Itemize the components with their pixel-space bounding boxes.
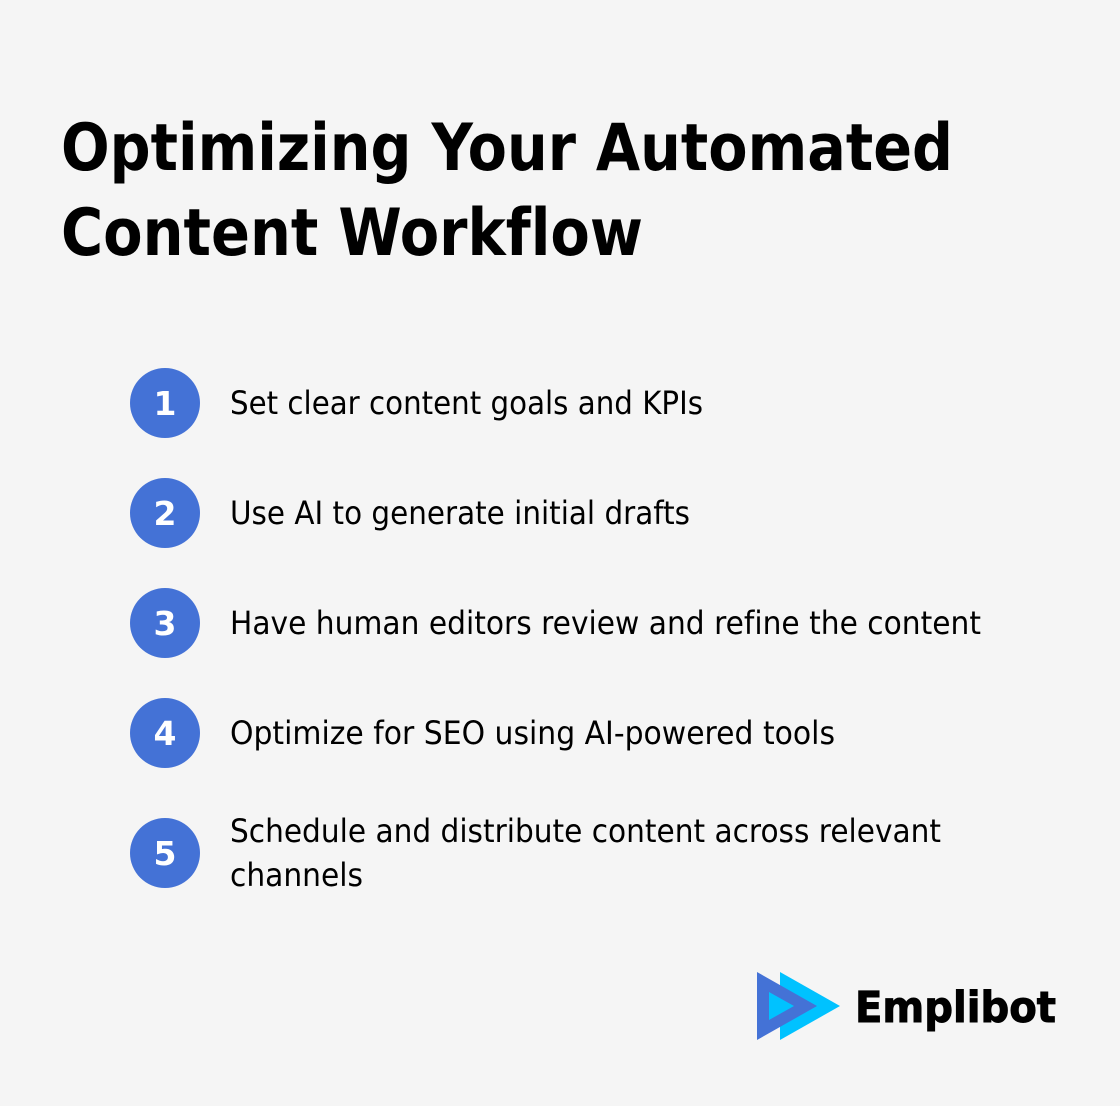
- step 5: [130, 812, 941, 894]
- title: Optimizing Your Automated: [61, 111, 953, 186]
- step 3: 3: [154, 604, 176, 643]
- step 4: [130, 698, 835, 768]
- step 1: Set clear content goals and KPIs: [230, 384, 703, 422]
- logo: Emplibot: Emplibot: [855, 983, 1056, 1033]
- step 2: Use AI to generate initial drafts: [230, 494, 690, 532]
- step 1: [130, 368, 703, 438]
- title: Content Workflow: [61, 196, 643, 271]
- step 3: Have human editors review and refine the content: [230, 604, 981, 642]
- title: [61, 111, 953, 271]
- logo: Emplibot: [757, 972, 1056, 1040]
- step 4: Optimize for SEO using AI-powered tools: [230, 714, 835, 752]
- step 2: 2: [154, 494, 176, 533]
- step 5: channels: [230, 856, 363, 894]
- step 2: [130, 478, 690, 548]
- step 5: Schedule and distribute content across relevant: [230, 812, 941, 850]
- step 3: [130, 588, 981, 658]
- step 1: 1: [154, 384, 176, 423]
- step 5: 5: [154, 834, 176, 873]
- step 4: 4: [154, 714, 176, 753]
